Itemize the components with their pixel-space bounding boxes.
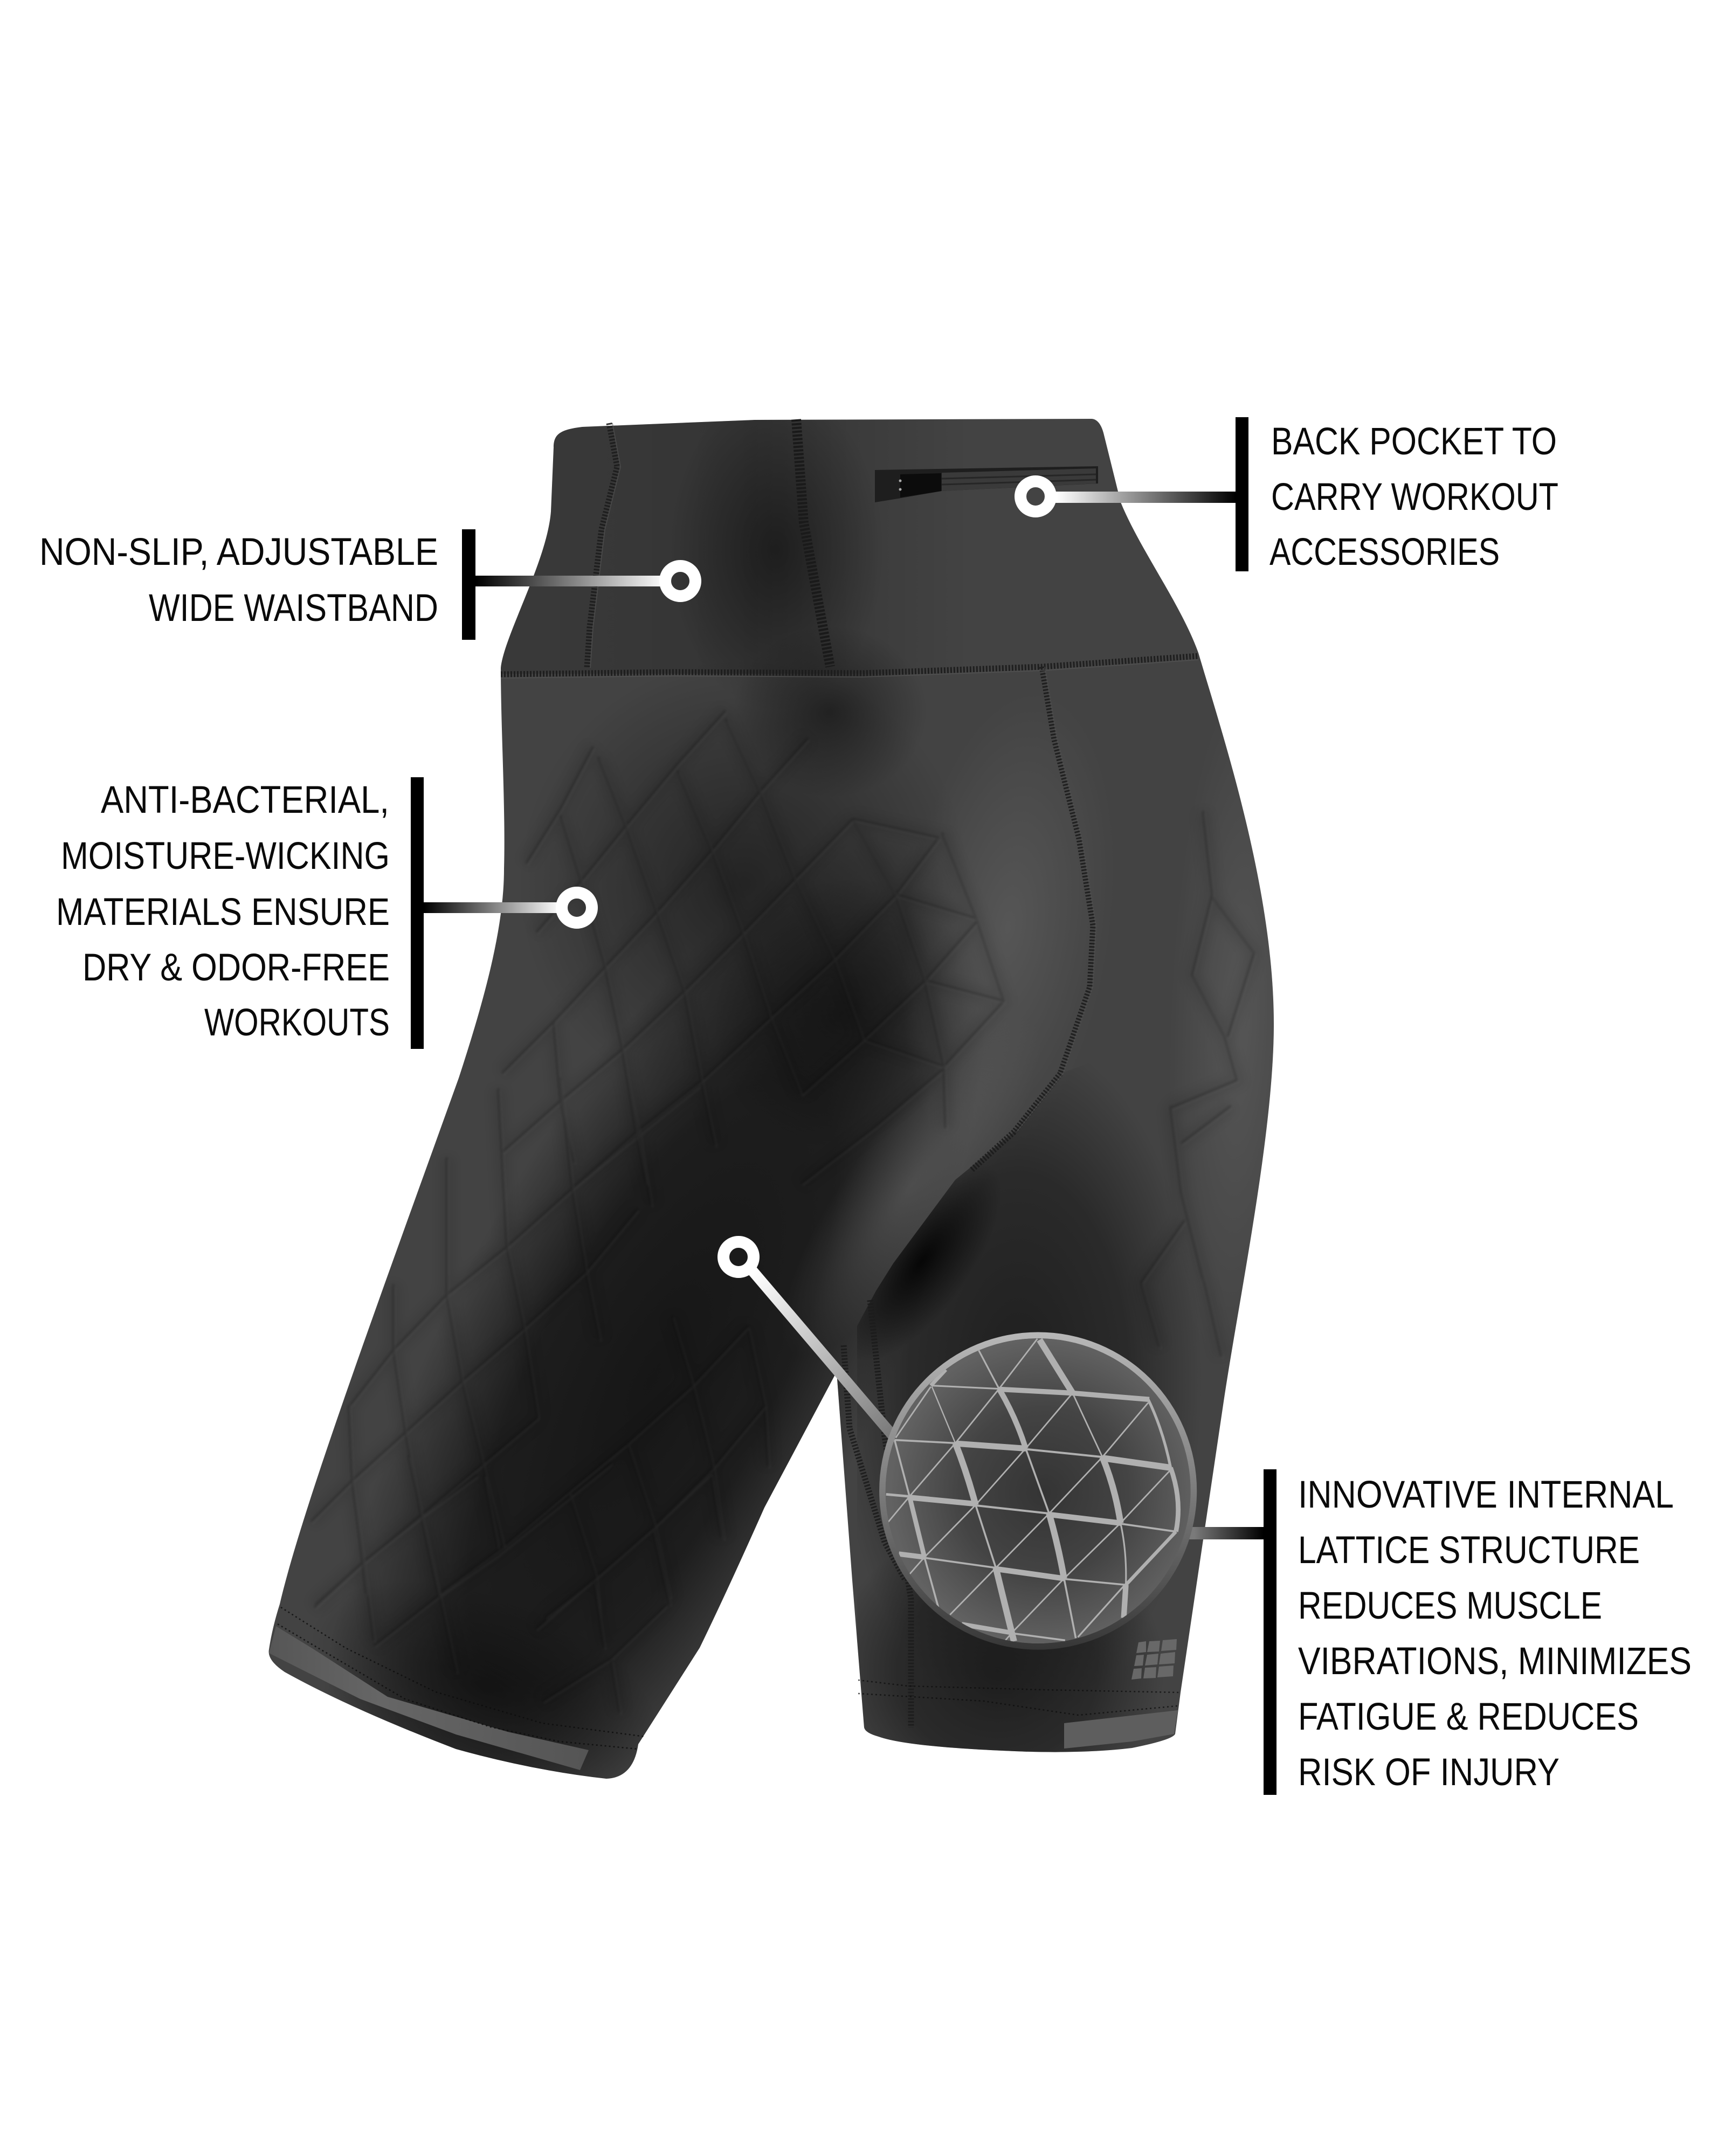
bracket bar xyxy=(1236,417,1248,571)
callout: back pocket xyxy=(1020,417,1558,573)
callout: moisture wicking materials xyxy=(56,777,592,1049)
leg hem: left band and stitching xyxy=(269,1607,645,1770)
label text: waistband: WIDE WAISTBAND xyxy=(149,587,438,630)
label text: back pocket xyxy=(1269,420,1558,573)
marker ring xyxy=(665,566,695,596)
label text: back pocket: CARRY WORKOUT xyxy=(1271,476,1558,519)
label text: materials: MATERIALS ENSURE xyxy=(56,891,390,934)
connector line xyxy=(1048,492,1236,503)
bracket bar xyxy=(462,529,475,640)
connector line xyxy=(475,576,667,586)
label text: materials: ANTI-BACTERIAL, xyxy=(101,779,389,821)
logo: nine block grid xyxy=(1131,1639,1177,1680)
connector line xyxy=(424,902,564,913)
marker ring xyxy=(723,1242,754,1272)
label text: lattice: INNOVATIVE INTERNAL xyxy=(1298,1474,1674,1516)
callout: internal lattice structure xyxy=(723,1242,1692,1795)
bracket bar xyxy=(1264,1469,1276,1795)
label text: waistband: NON-SLIP, ADJUSTABLE xyxy=(39,531,438,573)
label text: lattice: FATIGUE & REDUCES xyxy=(1298,1696,1639,1738)
label text: materials xyxy=(56,779,390,1044)
connector line xyxy=(1189,1527,1264,1539)
label text: lattice xyxy=(1298,1474,1692,1794)
label text: materials: WORKOUTS xyxy=(204,1001,390,1044)
leg hem: right band and stitching xyxy=(858,1680,1180,1749)
callout: waistband xyxy=(39,529,695,640)
label text: materials: DRY & ODOR-FREE xyxy=(82,946,390,989)
pointer line to magnifier xyxy=(747,1264,895,1438)
back pocket with zipper xyxy=(875,466,1098,502)
product: compression shorts xyxy=(268,419,1274,1779)
label text: lattice: RISK OF INJURY xyxy=(1298,1751,1560,1794)
label text: back pocket: BACK POCKET TO xyxy=(1271,420,1557,463)
label text: materials: MOISTURE-WICKING xyxy=(61,835,390,877)
label text: waistband xyxy=(39,531,438,630)
magnifier: fabric lattice detail xyxy=(879,1332,1197,1650)
shorts silhouette and shading xyxy=(268,419,1274,1779)
waistband seams xyxy=(501,419,1198,1727)
label text: lattice: LATTICE STRUCTURE xyxy=(1298,1529,1640,1572)
marker ring xyxy=(562,893,592,923)
right leg shadow below the fold xyxy=(857,1086,1178,1752)
label text: lattice: REDUCES MUSCLE xyxy=(1298,1585,1602,1627)
marker ring xyxy=(1020,481,1051,512)
bracket bar xyxy=(411,777,424,1049)
embossed lattice on thigh xyxy=(311,710,1255,1715)
label text: back pocket: ACCESSORIES xyxy=(1269,531,1500,573)
